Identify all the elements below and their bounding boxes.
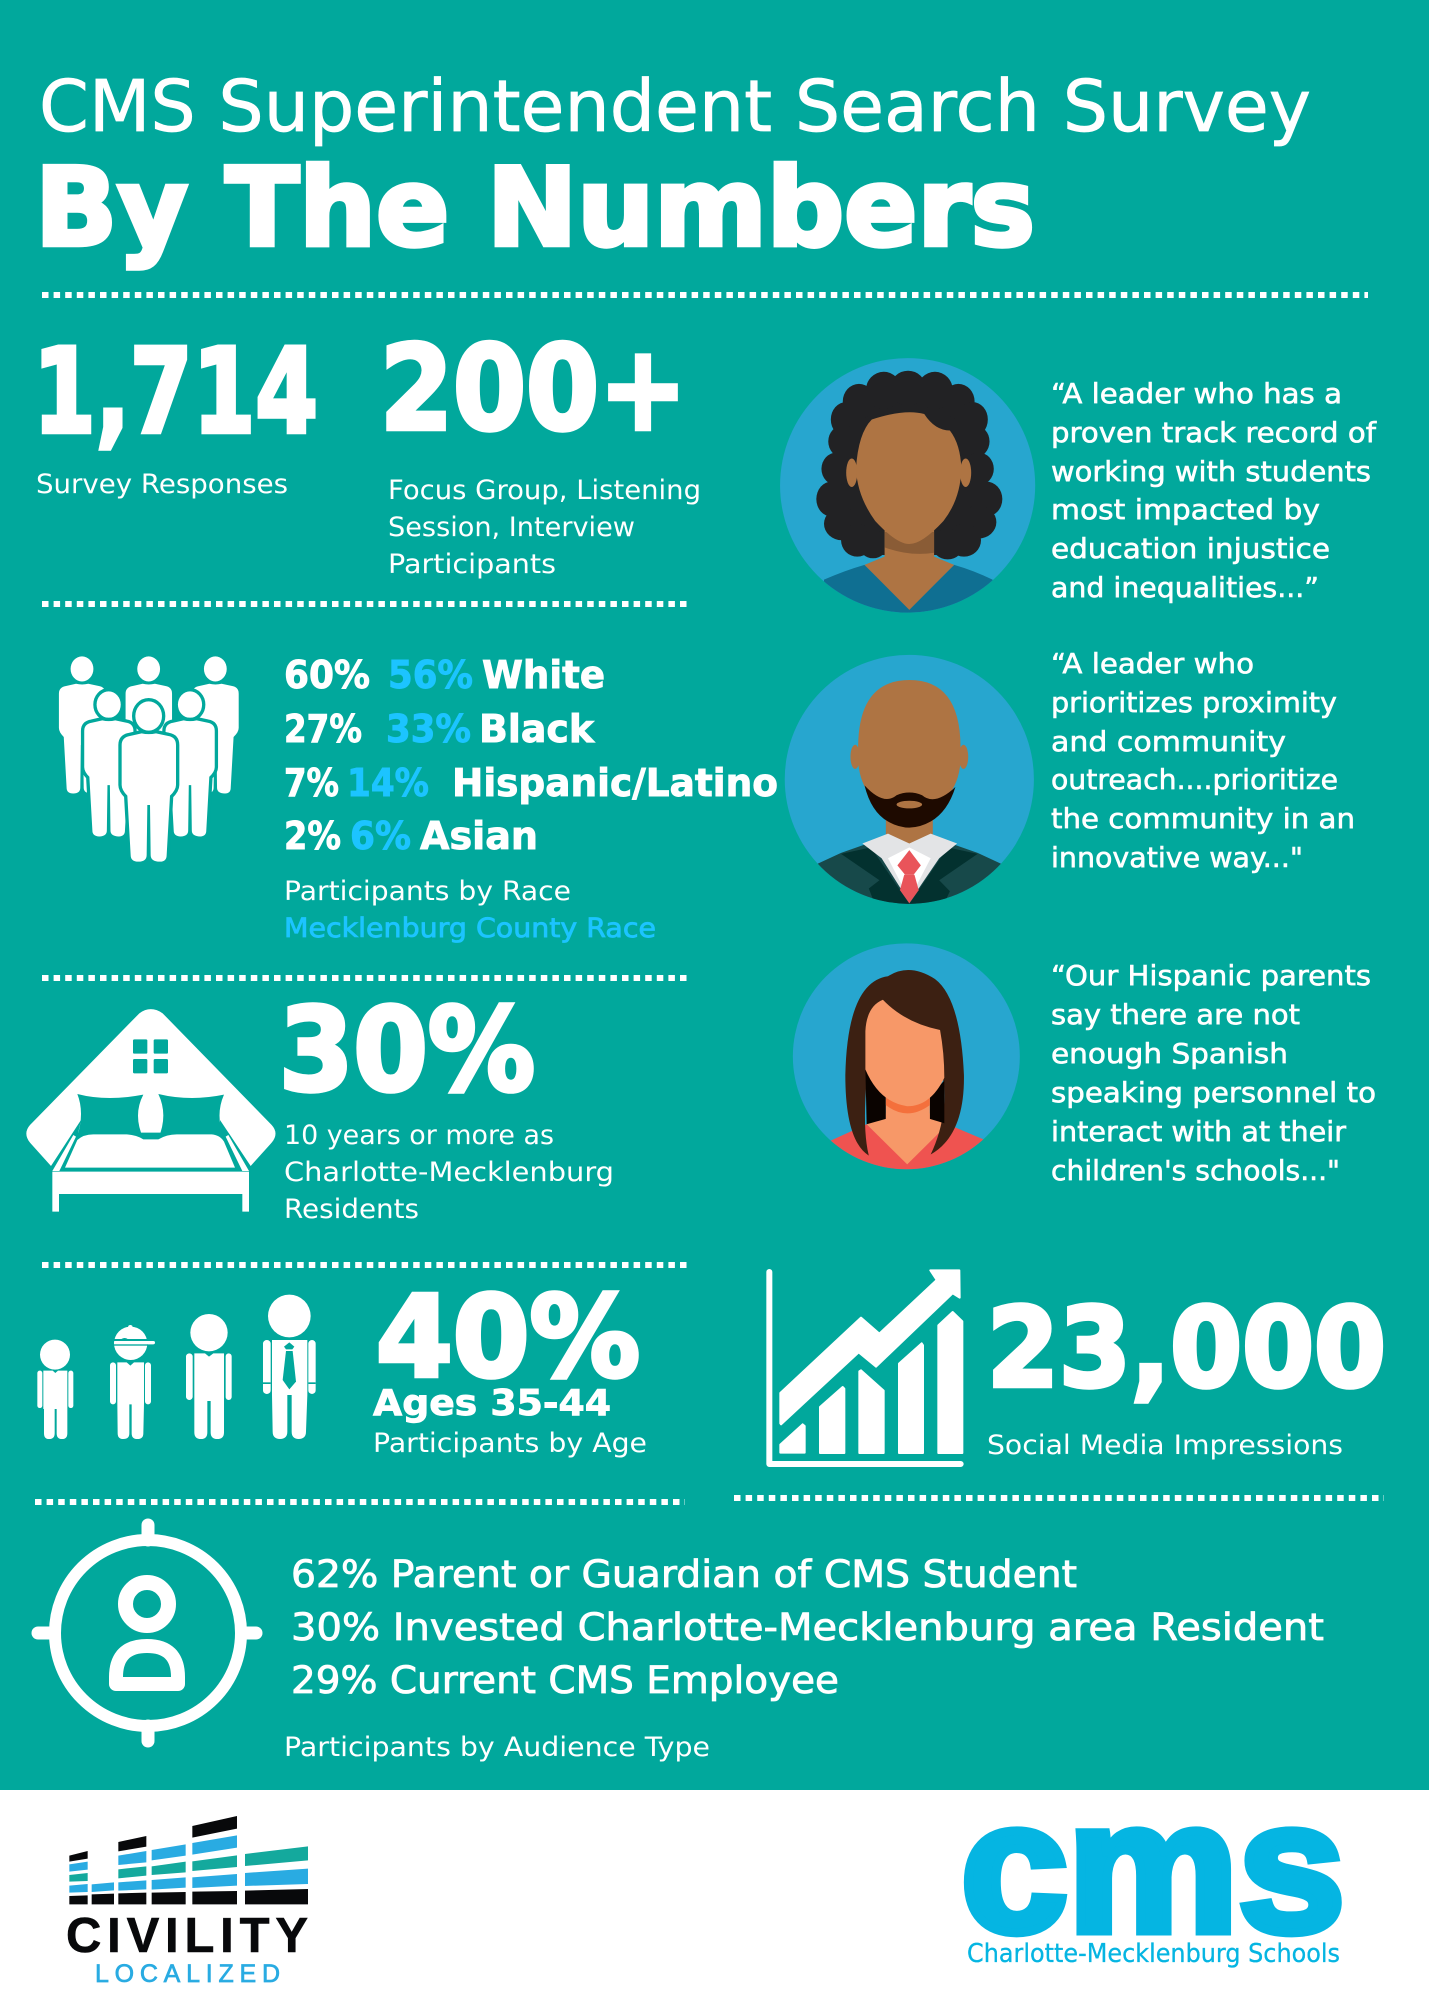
race statistics xyxy=(284,653,778,944)
race statistics: Hispanic/Latino xyxy=(452,761,778,805)
title xyxy=(35,65,1311,271)
stat: residents: 10 years or more as xyxy=(284,1120,554,1151)
stat: residents: Charlotte-Mecklenburg xyxy=(284,1157,614,1188)
stat: ages: 40% xyxy=(376,1273,640,1403)
quote 3: speaking personnel to xyxy=(1051,1076,1376,1109)
footer background xyxy=(0,1790,1429,2000)
stat: focus group participants: Participants xyxy=(388,549,556,580)
logo word: Civility: CIVILITY xyxy=(66,1909,308,1963)
race legend: participants: Participants by Race xyxy=(284,876,571,907)
stat: focus group participants: 200+ xyxy=(380,320,687,457)
stat: survey responses: 1,714 xyxy=(33,323,318,460)
quote 3: interact with at their xyxy=(1051,1115,1346,1148)
quote 3: enough Spanish xyxy=(1051,1037,1288,1070)
portrait: bald man with beard xyxy=(785,655,1034,905)
quote 1: and inequalities...” xyxy=(1051,571,1319,604)
quote 3 xyxy=(1051,959,1376,1187)
quote 1: education injustice xyxy=(1051,532,1330,565)
quote 3: “Our Hispanic parents xyxy=(1051,959,1371,992)
stat: ages xyxy=(373,1273,647,1459)
quote 2: outreach....prioritize xyxy=(1051,763,1338,796)
quote 1: proven track record of xyxy=(1051,416,1377,449)
race statistics: 56% xyxy=(388,653,473,697)
stat: focus group participants xyxy=(380,320,701,580)
quote 1: most impacted by xyxy=(1051,493,1320,526)
quote 3: say there are not xyxy=(1051,998,1300,1031)
stat: focus group participants: Session, Interview xyxy=(388,512,635,543)
stat: survey responses: Survey Responses xyxy=(36,469,288,500)
icon: growth chart xyxy=(769,1270,962,1464)
portrait: woman with straight hair xyxy=(793,943,1020,1174)
quote 2: “A leader who xyxy=(1051,647,1254,680)
quote 2: the community in an xyxy=(1051,802,1355,835)
stat: social media impressions: 23,000 xyxy=(987,1284,1386,1412)
quote 2: and community xyxy=(1051,725,1286,758)
quote 2: prioritizes proximity xyxy=(1051,686,1337,719)
stat: survey responses xyxy=(33,323,318,500)
race statistics: White xyxy=(482,653,605,697)
icon: house with bed xyxy=(26,1009,275,1212)
audience type statistics xyxy=(284,1553,1324,1763)
title line 2: By The Numbers xyxy=(35,146,1035,271)
quote 3: children's schools..." xyxy=(1051,1154,1340,1187)
race statistics: Black xyxy=(479,707,595,751)
race statistics: 33% xyxy=(386,707,471,751)
audience type statistics: 30% Invested Charlotte-Mecklenburg area Resident xyxy=(291,1606,1324,1649)
audience type statistics: 29% Current CMS Employee xyxy=(291,1659,839,1702)
race statistics: 27% xyxy=(284,707,362,751)
logo: CMS xyxy=(961,1764,1345,1971)
race statistics: 14% xyxy=(347,761,429,805)
race statistics: 6% xyxy=(350,814,411,858)
title line 1: CMS Superintendent Search Survey xyxy=(39,65,1311,148)
stat: social media impressions: Social Media Impressions xyxy=(987,1430,1343,1461)
race statistics: 2% xyxy=(284,814,341,858)
audience caption: Participants by Audience Type xyxy=(284,1732,710,1763)
logo bars xyxy=(69,1816,308,1904)
stat: social media impressions xyxy=(987,1284,1386,1461)
stat: residents xyxy=(279,984,614,1225)
quote 1 xyxy=(1051,377,1377,604)
quote 1: working with students xyxy=(1051,455,1371,488)
quote 2 xyxy=(1051,647,1355,874)
icon: group of people xyxy=(59,656,239,862)
logo word: cms: cms xyxy=(961,1764,1345,1971)
stat: ages: Participants by Age xyxy=(373,1428,647,1459)
audience type statistics: 62% Parent or Guardian of CMS Student xyxy=(291,1553,1077,1596)
race statistics: 60% xyxy=(284,653,370,697)
stat: residents: 30% xyxy=(279,984,535,1118)
portrait: woman with curly hair xyxy=(780,358,1035,620)
stat: ages: Ages 35-44 xyxy=(373,1383,611,1424)
race legend: county: Mecklenburg County Race xyxy=(284,913,656,944)
stat: residents: Residents xyxy=(284,1194,419,1225)
quote 1: “A leader who has a xyxy=(1051,377,1342,410)
logo subtitle: Charlotte-Mecklenburg Schools xyxy=(967,1939,1340,1969)
race statistics: Asian xyxy=(420,814,538,858)
quote 2: innovative way..." xyxy=(1051,841,1303,874)
logo word: Localized: LOCALIZED xyxy=(95,1960,280,1988)
icon: target with person xyxy=(38,1525,256,1741)
stat: focus group participants: Focus Group, Listening xyxy=(388,475,701,506)
logo: Civility Localized xyxy=(66,1816,308,1988)
race statistics: 7% xyxy=(284,761,339,805)
icon: four people by age xyxy=(37,1295,316,1439)
